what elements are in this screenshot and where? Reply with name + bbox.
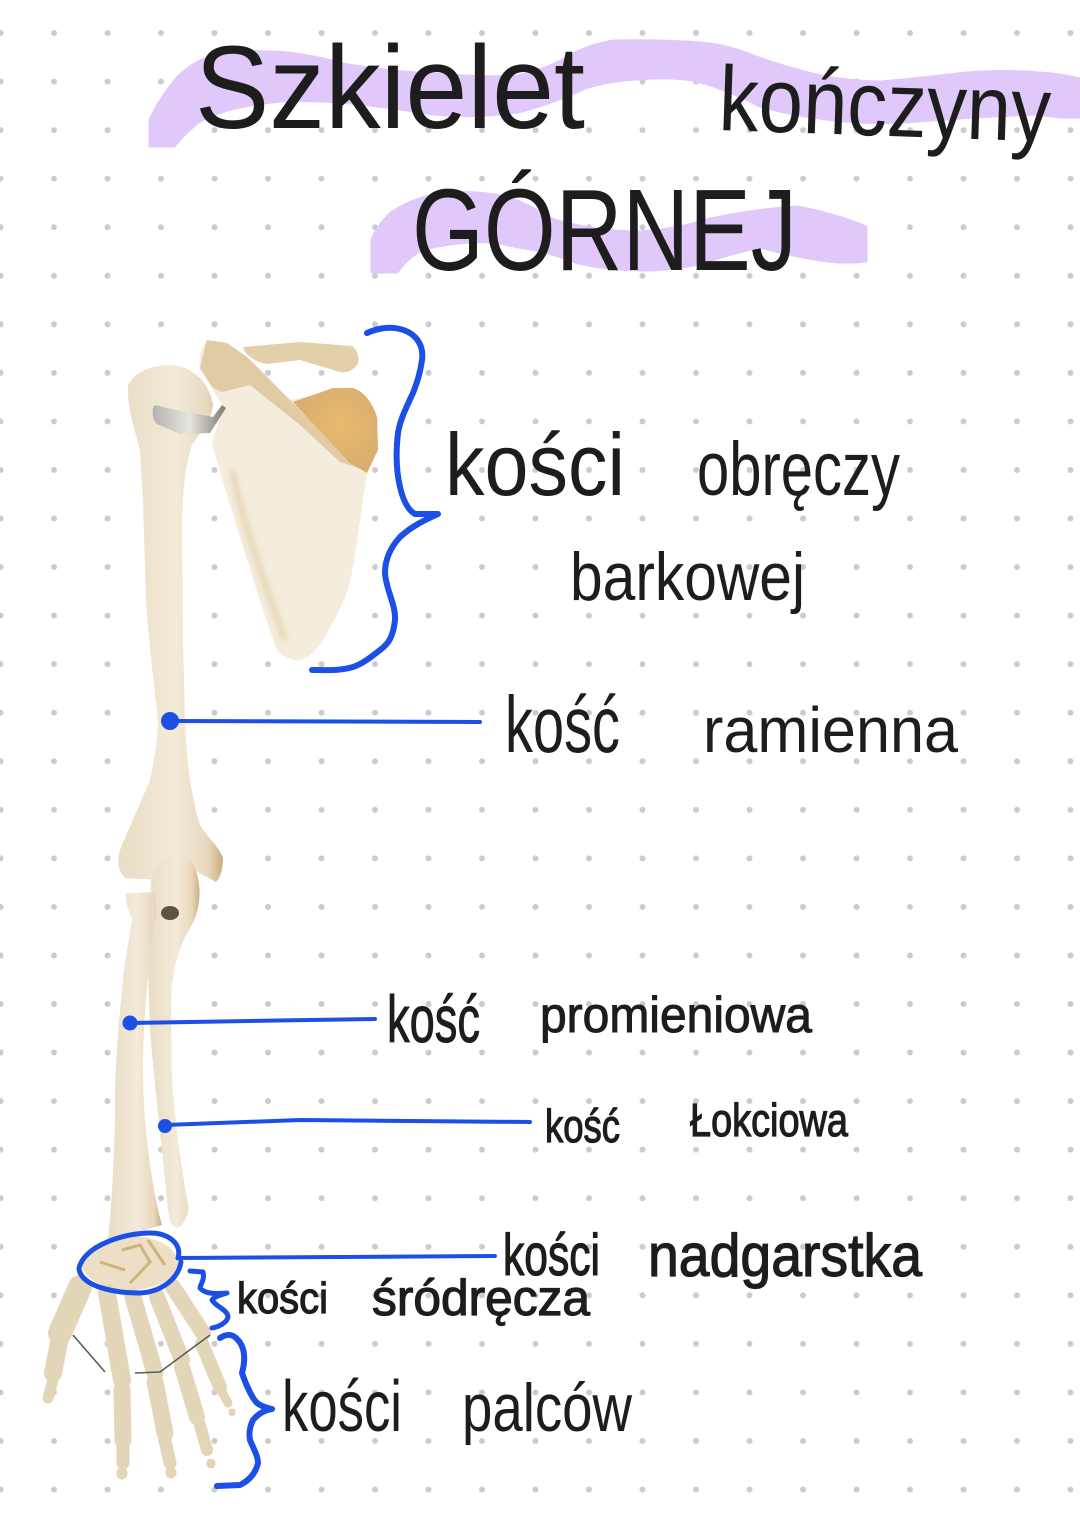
bone: carpal bones: [82, 1236, 178, 1290]
leader line: humerus: [161, 712, 480, 730]
bone: elbow screw: [161, 906, 179, 920]
bone: clavicle: [243, 342, 358, 372]
label: metacarpal bones: śródręcza: [372, 1270, 590, 1326]
title: [195, 22, 1053, 295]
loop and leader line: carpal bones: [79, 1233, 495, 1293]
bone: hand metacarpals and phalanges: [48, 1287, 232, 1474]
brace: metacarpals: [190, 1271, 228, 1328]
title highlight: second line: [372, 192, 866, 272]
label: metacarpal bones: [237, 1270, 590, 1326]
leader line: ulna: [158, 1119, 530, 1133]
label: shoulder girdle bones: barkowej: [570, 539, 805, 615]
label: ulna: [545, 1094, 848, 1152]
label: finger bones: kości: [282, 1367, 402, 1447]
title highlight: first line: [150, 41, 1080, 146]
bone: radius: [108, 892, 162, 1240]
blue annotations: [79, 328, 530, 1486]
label: carpal bones: kości: [503, 1223, 600, 1288]
bone: scapula: [199, 340, 378, 660]
title: GÓRNEJ: [412, 165, 797, 295]
label: ulna: kość: [545, 1100, 620, 1152]
label: metacarpal bones: kości: [237, 1274, 328, 1323]
label: carpal bones: [503, 1222, 923, 1289]
label: humerus: ramienna: [703, 694, 958, 766]
label: radius: promieniowa: [540, 987, 812, 1043]
label: humerus: kość: [505, 680, 620, 769]
label: humerus: [505, 680, 958, 769]
label: ulna: Łokciowa: [690, 1094, 848, 1146]
label: finger bones: [282, 1367, 633, 1447]
label: radius: [387, 982, 812, 1056]
brace: phalanges: [217, 1335, 272, 1486]
label: radius: kość: [387, 982, 480, 1056]
label: shoulder girdle bones: kości: [445, 415, 625, 514]
title: Szkielet: [195, 22, 585, 154]
label: finger bones: palców: [462, 1370, 633, 1446]
leader line: radius: [122, 1016, 375, 1030]
label: shoulder girdle bones: [445, 415, 900, 615]
bone: ulna: [148, 856, 200, 1228]
label: carpal bones: nadgarstka: [648, 1222, 923, 1289]
bone: humerus: [118, 365, 223, 882]
label: shoulder girdle bones: obręczy: [697, 427, 900, 512]
arm skeleton illustration: [48, 340, 378, 1474]
bone: metal clasp on humerus: [153, 405, 226, 434]
bone: hand wire: [73, 1335, 210, 1373]
brace: shoulder girdle: [312, 328, 438, 670]
